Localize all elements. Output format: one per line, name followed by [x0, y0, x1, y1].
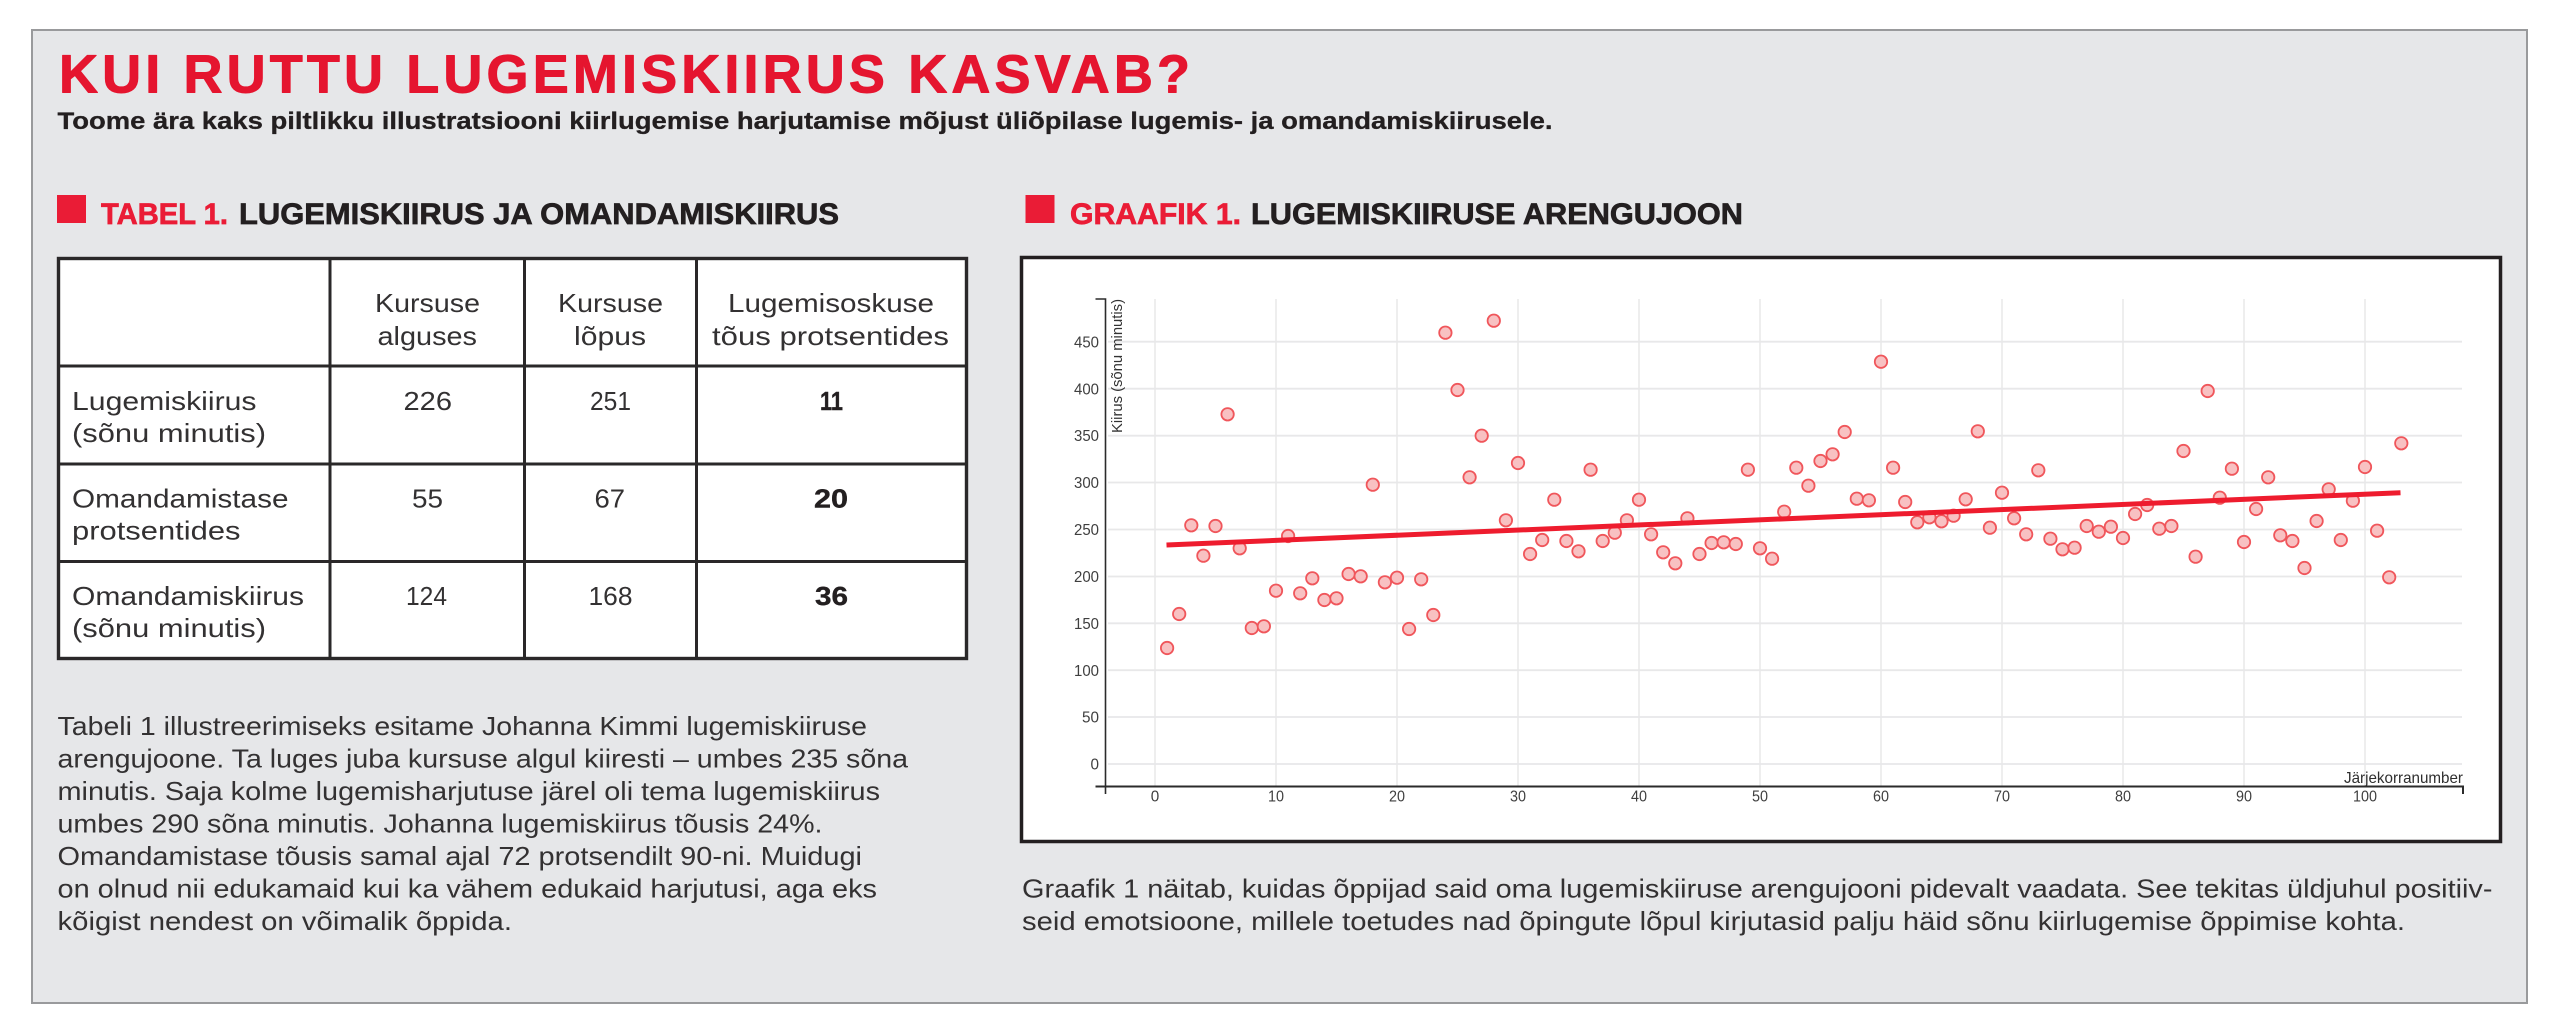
table row: reading speed: Lugemiskiirus [72, 386, 256, 416]
y axis tick labels: 150 [1074, 616, 1099, 633]
table header row: tõus protsentides [712, 321, 949, 351]
x axis tick labels: 80 [2115, 788, 2131, 806]
heading text: table title: LUGEMISKIIRUS JA OMANDAMISKIIRUS [239, 198, 839, 231]
text block: table explanation: on olnud nii edukamaid kui ka vähem edukaid harjutusi, aga eks [58, 874, 877, 904]
trend line [1166, 493, 2400, 545]
x axis tick labels: 100 [2353, 788, 2377, 806]
table header row: lõpus [574, 321, 646, 351]
table header row [375, 288, 949, 351]
y axis tick labels: 450 [1074, 334, 1099, 352]
table row: effective reading speed: 36 [815, 581, 848, 611]
text block: graph explanation: Graafik 1 näitab, kuidas õppijad said oma lugemiskiiruse arengujooni pidevalt vaadata. See tekitas üldjuhul positiiv- [1022, 874, 2492, 904]
y axis tick labels: 350 [1074, 428, 1099, 445]
table: reading speed and comprehension [58, 258, 966, 659]
table background [58, 258, 966, 658]
text block: graph explanation: seid emotsioone, millele toetudes nad õpingute lõpul kirjutasid palju häid sõnu kiirlugemise õppimise kohta. [1022, 906, 2405, 936]
text block: table explanation: Tabeli 1 illustreerimiseks esitame Johanna Kimmi lugemiskiiruse [58, 711, 867, 741]
text block: table explanation: arengujoone. Ta luges juba kursuse algul kiiresti – umbes 235 sõna [58, 744, 909, 774]
x axis tick labels: 70 [1994, 788, 2010, 806]
table header row: Lugemisoskuse [728, 288, 934, 318]
text block: table explanation: Omandamistase tõusis samal ajal 72 protsendilt 90-ni. Muidugi [58, 841, 862, 871]
x axis tick labels: 90 [2236, 788, 2252, 806]
table header row: Kursuse [558, 288, 663, 318]
subtitle: Toome ära kaks piltlikku illustratsiooni kiirlugemise harjutamise mõjust üliõpilase lugemis- ja omandamiskiirusele. [58, 108, 1552, 135]
x axis tick labels: 20 [1389, 788, 1405, 806]
table row: comprehension: Omandamistase [72, 484, 288, 514]
title: KUI RUTTU LUGEMISKIIRUS KASVAB? [59, 44, 1190, 104]
table row: effective reading speed: Omandamiskiirus [72, 581, 304, 611]
x axis tick labels [1151, 788, 2377, 806]
x axis tick labels: 50 [1752, 788, 1768, 806]
data points [1161, 314, 2408, 654]
table row: effective reading speed: (sõnu minutis) [72, 613, 266, 643]
table header row: Kursuse [375, 288, 480, 318]
y axis tick labels: 50 [1082, 710, 1099, 726]
table row: reading speed [72, 386, 843, 448]
x axis tick labels: 40 [1631, 788, 1647, 806]
heading: graph 1 [1026, 195, 1743, 231]
text block: table explanation [58, 711, 909, 936]
text block: table explanation: minutis. Saja kolme lugemisharjutuse järel oli tema lugemiskiirus [58, 776, 880, 806]
chart frame [1022, 258, 2500, 842]
text block: table explanation: kõigist nendest on võimalik õppida. [58, 906, 512, 936]
y axis [1074, 299, 1126, 794]
table row: comprehension: 67 [594, 484, 625, 514]
y axis tick labels [1074, 334, 1099, 774]
y axis tick labels: 200 [1074, 569, 1099, 586]
chart: reading speed scatter plot [1022, 258, 2500, 842]
table row: effective reading speed: 168 [588, 581, 632, 611]
table row: effective reading speed [72, 581, 848, 643]
table row: effective reading speed: 124 [406, 581, 447, 611]
icon: red square [1026, 195, 1054, 223]
x axis tick labels: 0 [1151, 788, 1159, 806]
y axis tick labels: 0 [1090, 756, 1099, 774]
table row: reading speed: 251 [590, 386, 631, 416]
table row: comprehension [72, 484, 848, 546]
table row: comprehension: protsentides [72, 516, 240, 546]
table row: reading speed: (sõnu minutis) [72, 418, 266, 448]
text block: table explanation: umbes 290 sõna minutis. Johanna lugemiskiirus tõusis 24%. [58, 808, 822, 838]
heading label: TABEL 1.: TABEL 1. [101, 198, 228, 231]
table row: comprehension: 20 [814, 484, 848, 514]
x axis tick labels: 10 [1268, 788, 1284, 806]
x axis tick labels: 30 [1510, 788, 1526, 806]
x axis tick labels: 60 [1873, 788, 1889, 806]
table row: reading speed: 226 [404, 386, 452, 416]
y axis tick labels: 100 [1074, 663, 1099, 680]
y axis title: Kiirus (sõnu minutis) [1109, 299, 1126, 433]
x axis [1096, 770, 2464, 806]
heading text: graph title: LUGEMISKIIRUSE ARENGUJOON [1251, 198, 1743, 231]
text block: graph explanation [1022, 874, 2492, 936]
table header row: alguses [378, 321, 477, 351]
heading label: GRAAFIK 1.: GRAAFIK 1. [1070, 198, 1241, 231]
table row: reading speed: 11 [820, 386, 843, 416]
y axis tick labels: 250 [1074, 522, 1099, 539]
y axis tick labels: 300 [1074, 475, 1099, 492]
y axis tick labels: 400 [1074, 382, 1099, 398]
icon: red square [57, 195, 86, 223]
table row: comprehension: 55 [412, 484, 443, 514]
x axis title: Järjekorranumber [2344, 770, 2464, 787]
heading: table 1 [57, 195, 839, 231]
